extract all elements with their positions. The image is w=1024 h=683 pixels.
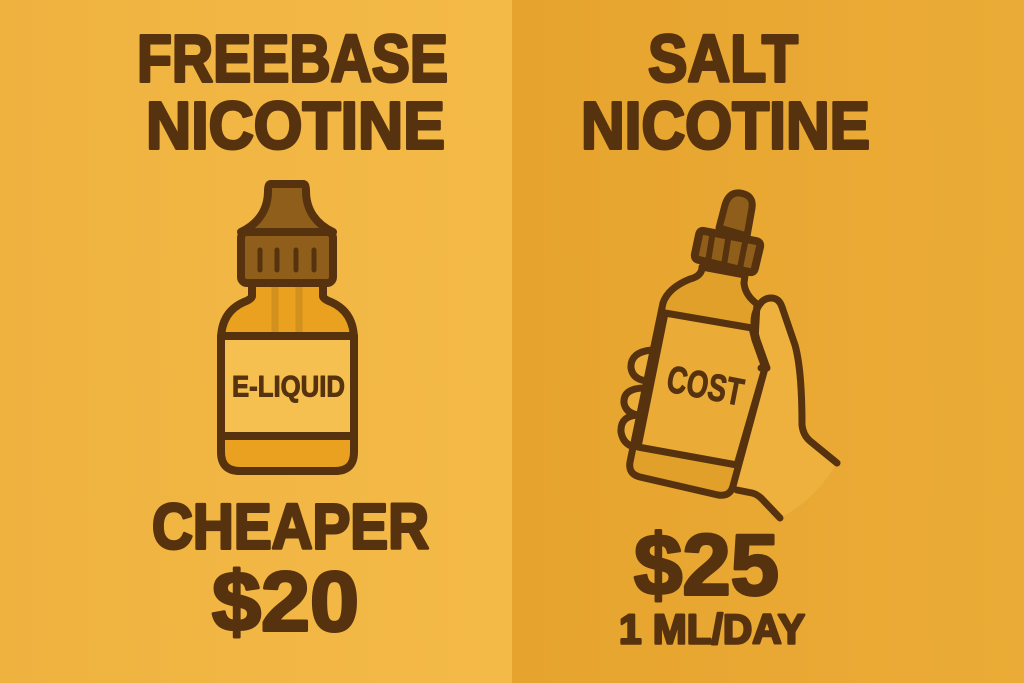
heading: salt nicotine: SALT	[648, 22, 798, 96]
cap	[241, 232, 333, 283]
cap ribs	[708, 237, 745, 268]
label	[221, 336, 354, 436]
heading: freebase nicotine: NICOTINE	[146, 88, 445, 164]
caption: cheaper: CHEAPER	[152, 490, 429, 562]
heading: salt nicotine: NICOTINE	[581, 88, 870, 164]
caption: 1 ml/day: 1 ML/DAY	[619, 606, 805, 652]
wrist line	[737, 490, 780, 518]
dropper bulb	[719, 193, 752, 236]
label text: E-LIQUID	[232, 370, 345, 404]
heading: salt nicotine	[581, 22, 870, 164]
icon: e-liquid bottle	[221, 184, 354, 471]
price: $25: $25	[634, 518, 779, 614]
heading: freebase nicotine: FREEBASE	[137, 22, 448, 96]
icon: hand holding dropper bottle	[621, 193, 837, 518]
bottle body	[221, 283, 354, 471]
heading: freebase nicotine	[137, 22, 448, 164]
panel: freebase nicotine	[0, 0, 512, 683]
price: $20: $20	[212, 554, 359, 648]
label text: COST	[663, 359, 747, 415]
fingers	[621, 350, 652, 447]
hand	[737, 298, 837, 518]
bottle body	[630, 267, 765, 495]
dropper lines	[275, 287, 299, 332]
cap ribs	[260, 250, 314, 270]
nozzle	[241, 184, 333, 232]
panel: salt nicotine	[512, 0, 1024, 683]
cap	[695, 231, 760, 272]
label	[638, 313, 765, 465]
hand outline	[754, 298, 837, 463]
